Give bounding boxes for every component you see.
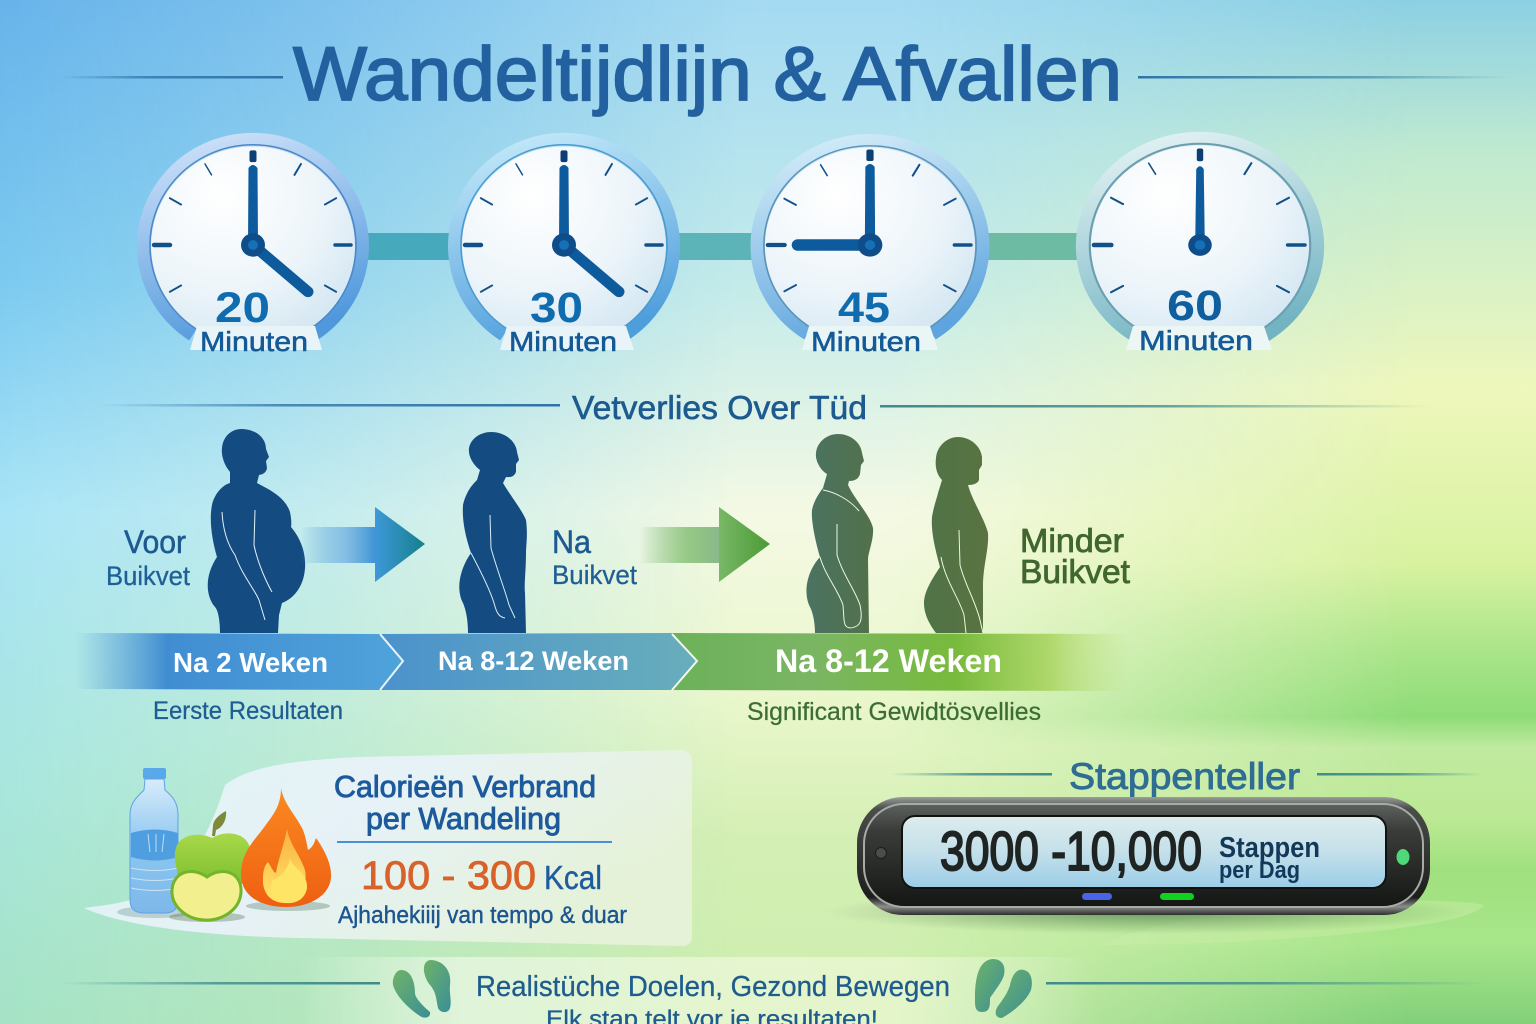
icon: footprints left xyxy=(393,960,451,1018)
label: na buikvet: Na xyxy=(552,524,591,560)
heading: stappenteller: Stappenteller xyxy=(1069,756,1300,797)
clock: 30 minuten xyxy=(455,140,673,357)
panel: calorieën xyxy=(84,750,692,946)
label: voor buikvet xyxy=(106,524,190,591)
icon: flame xyxy=(241,788,331,911)
panel heading xyxy=(334,769,596,836)
connector bands between clocks xyxy=(365,233,1081,260)
segment: na 8-12 weken groen xyxy=(672,633,1130,691)
segment: na 2 weken xyxy=(75,633,403,690)
silhouette: man slim xyxy=(924,437,988,633)
title: Wandeltijdlijn & Afvallen xyxy=(293,32,1122,117)
clock: 20 minuten xyxy=(144,140,362,357)
clock: 20 minuten: Minuten xyxy=(200,326,308,357)
kcal value: Kcal xyxy=(544,859,602,896)
clock: 45 minuten: 45 xyxy=(838,284,890,332)
label: minder buikvet xyxy=(1020,522,1130,590)
arrow: blue xyxy=(300,507,425,582)
label: voor buikvet: Buikvet xyxy=(106,561,190,591)
clock: 20 minuten: 20 xyxy=(215,284,270,332)
clock: 60 minuten: 60 xyxy=(1167,282,1223,330)
icon: footprints right xyxy=(975,959,1032,1018)
clock: 60 minuten xyxy=(1083,139,1317,356)
screen: Stappen xyxy=(1219,832,1320,864)
clock: 45 minuten xyxy=(758,141,982,357)
silhouette: woman slim xyxy=(806,434,873,633)
silhouette: voor buikvet xyxy=(208,429,305,633)
clock: 45 minuten: Minuten xyxy=(811,326,921,357)
timeline band xyxy=(75,633,1130,691)
screen: per Dag xyxy=(1219,857,1300,884)
clock: 30 minuten: 30 xyxy=(530,284,583,332)
label: minder buikvet: Minder xyxy=(1020,522,1124,559)
caption: eerste resultaten: Eerste Resultaten xyxy=(153,697,343,725)
segment: na 8-12 weken groen: Na 8-12 Weken xyxy=(775,643,1002,679)
screen: 3000 -10,000 xyxy=(940,820,1202,882)
label: na buikvet: Buikvet xyxy=(552,560,637,590)
silhouette: na buikvet xyxy=(459,432,527,633)
icon: apple xyxy=(169,811,251,922)
pedometer device xyxy=(825,797,1484,945)
screen xyxy=(902,816,1386,888)
segment: na 8-12 weken: Na 8-12 Weken xyxy=(438,646,629,676)
footer headline: Realistüche Doelen, Gezond Bewegen xyxy=(476,971,950,1003)
panel heading: Calorieën Verbrand xyxy=(334,769,596,804)
panel heading: per Wandeling xyxy=(366,801,561,836)
label: minder buikvet: Buikvet xyxy=(1020,553,1130,590)
label: na buikvet xyxy=(552,524,637,590)
clock: 30 minuten: Minuten xyxy=(509,326,617,357)
segment: na 8-12 weken xyxy=(380,633,697,690)
panel note: Ajhahekiiij van tempo & duar xyxy=(338,902,627,929)
section heading: Vetverlies Over Tüd: Vetverlies Over Tüd xyxy=(572,389,867,426)
segment: na 2 weken: Na 2 Weken xyxy=(173,647,328,678)
label: voor buikvet: Voor xyxy=(124,524,186,560)
footer band xyxy=(60,957,1486,1024)
arrow: green xyxy=(640,507,770,582)
clock: 60 minuten: Minuten xyxy=(1139,325,1253,356)
caption: significant: Significant Gewidtösvellies xyxy=(747,698,1041,726)
icon: water bottle xyxy=(117,768,193,918)
kcal value: 100 - 300 xyxy=(361,854,536,898)
